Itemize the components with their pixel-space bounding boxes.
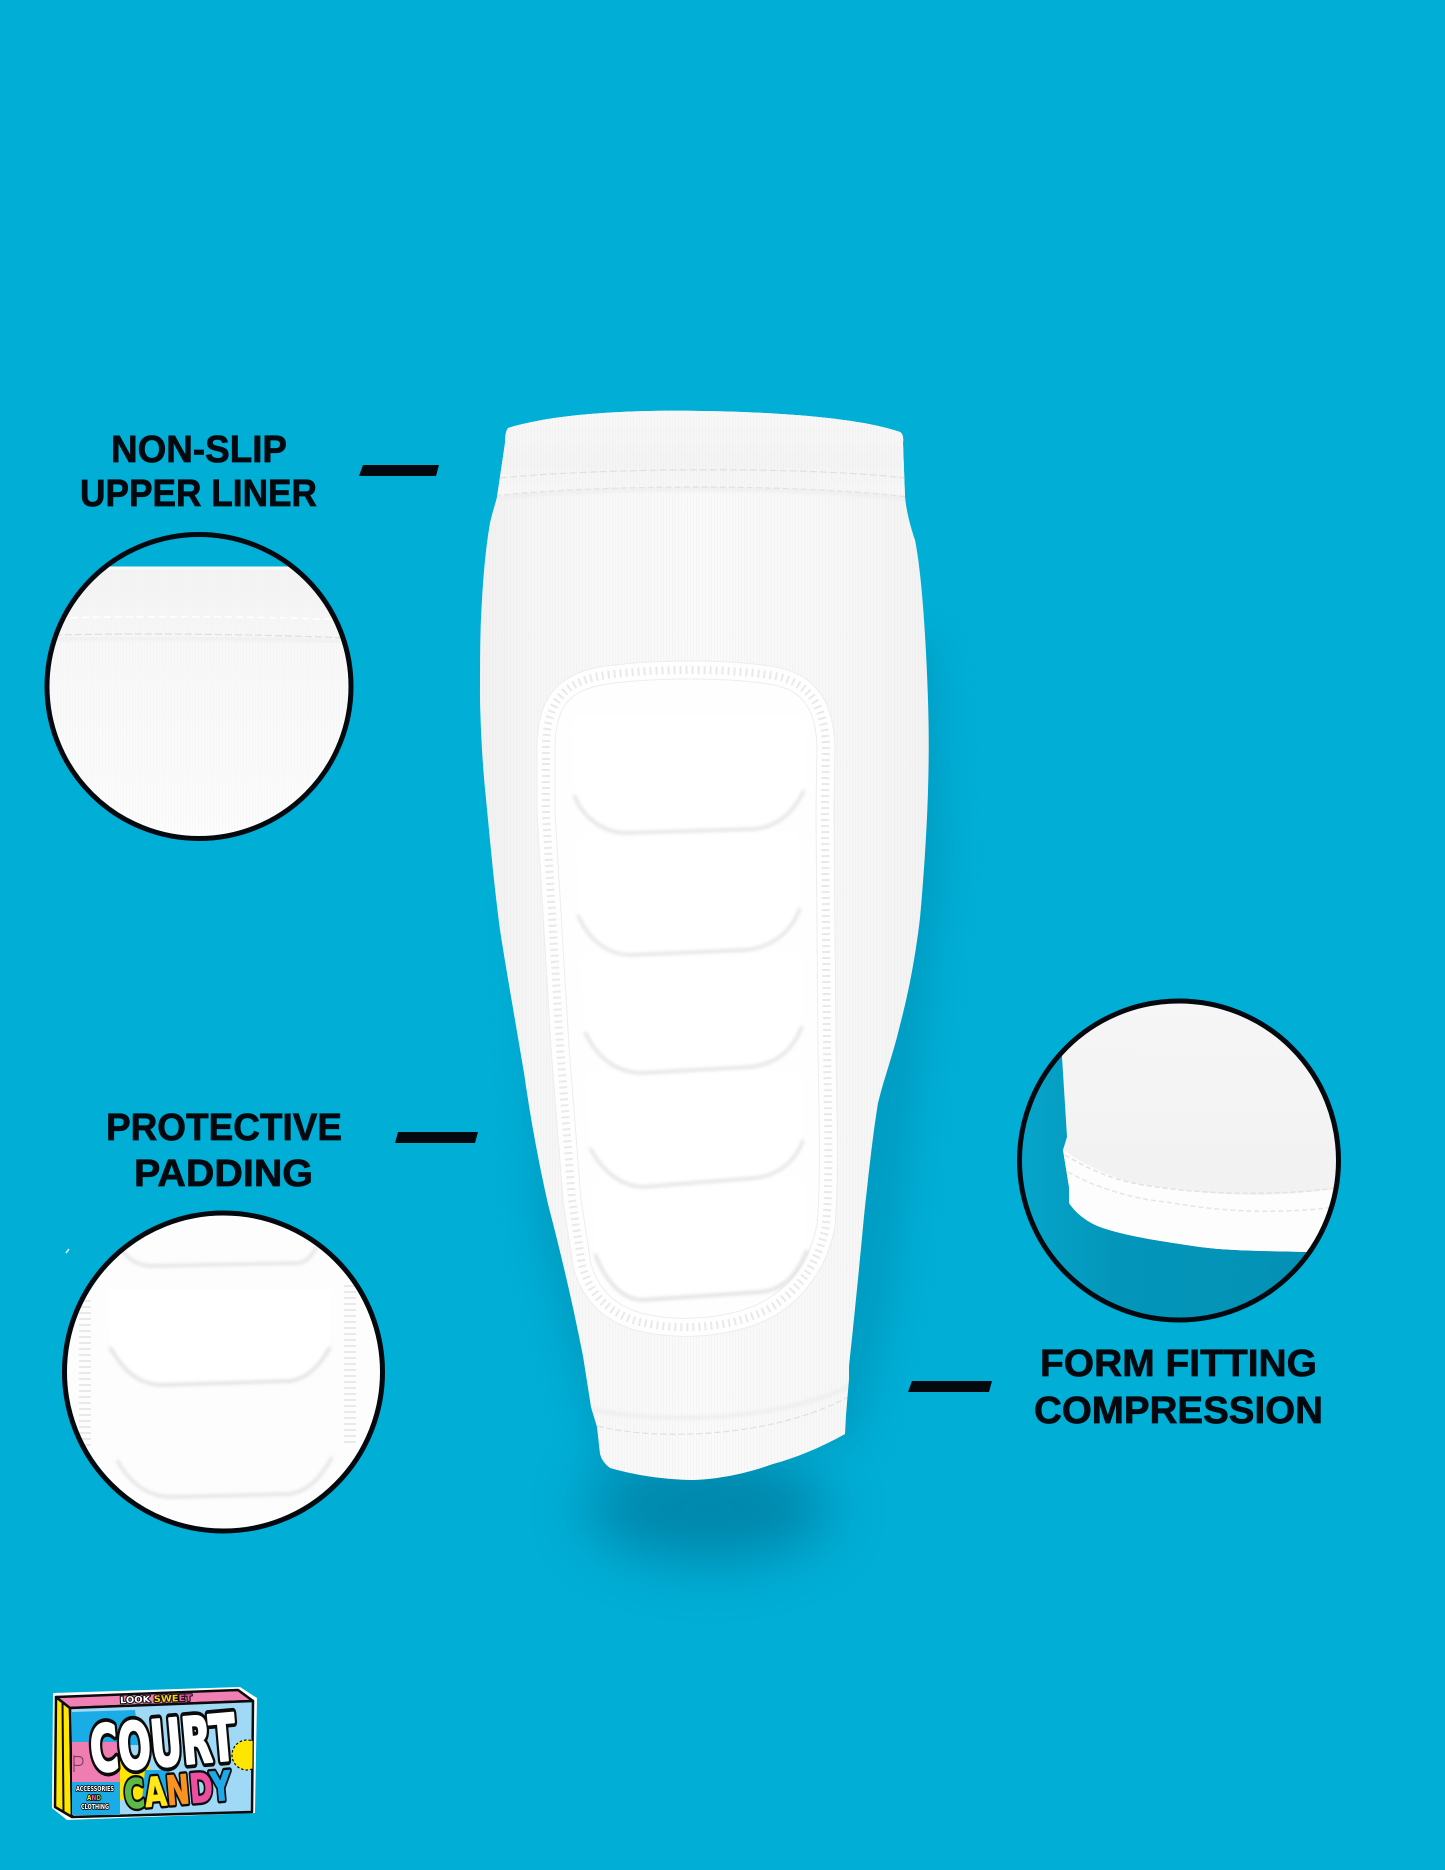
logo box side [55,1697,72,1817]
logo: CANDY: CANDY [122,1763,234,1819]
label: non-slip upper liner: NON-SLIP [111,429,287,471]
bottom hem [585,1385,852,1434]
product: padded shin sleeve [470,405,940,1485]
sleeve drop shadow [515,640,945,1562]
stray tick [66,1249,69,1253]
detail circle: form fitting compression [1015,990,1345,1325]
label: non-slip upper liner [80,429,317,515]
logo: Court Candy box [52,1687,262,1820]
logo box front [70,1701,262,1817]
logo: COURT: COURT [87,1701,239,1788]
label: form fitting compression: FORM FITTING [1040,1343,1317,1385]
label: non-slip upper liner: UPPER LINER [80,473,317,515]
leader line: compression [908,1381,992,1392]
logo box top [56,1690,253,1708]
leader line: upper liner [359,465,439,476]
logo: CANDY: CANDY [122,1763,234,1819]
detail circle: padding [60,1210,390,1540]
label: form fitting compression [1034,1343,1323,1432]
label: protective padding: PADDING [134,1153,313,1195]
logo: COURT [87,1701,239,1788]
logo: accessories and clothing: CLOTHING [81,1803,109,1811]
detail circle: upper liner [40,530,360,850]
leader line: padding [395,1132,478,1143]
logo: look sweet: LOOK SWEET [120,1694,193,1706]
logo: accessories and clothing: ACCESSORIES [76,1785,114,1793]
logo: COURT: COURT [87,1701,239,1788]
logo box outline [52,1687,257,1820]
sleeve body [480,411,929,1480]
logo: accessories and clothing: AND [87,1794,101,1802]
label: protective padding: PROTECTIVE [106,1107,342,1149]
foam pads [572,715,807,1300]
label: protective padding [106,1107,342,1195]
label: form fitting compression: COMPRESSION [1034,1390,1323,1432]
pad panel seam [546,670,828,1327]
upper liner band [470,405,940,1485]
logo: accessories and clothing [76,1785,114,1811]
